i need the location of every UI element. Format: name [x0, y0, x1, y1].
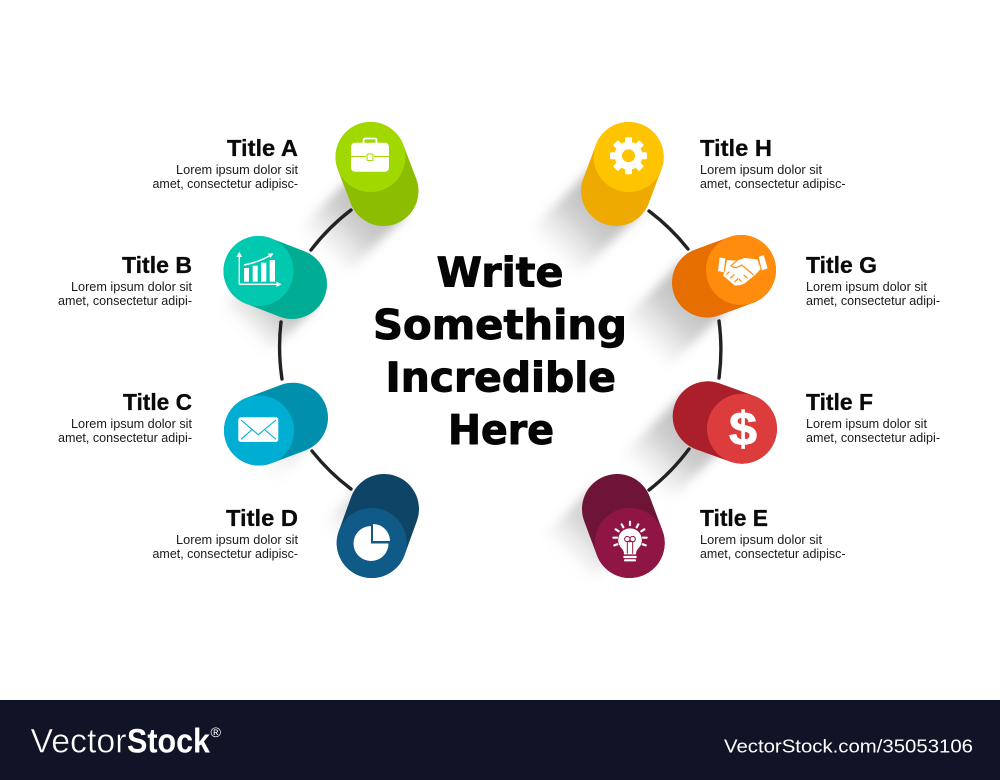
footer logo [30, 723, 222, 761]
label: Title B [58, 252, 192, 308]
footer logo: Stock [127, 723, 210, 761]
label: Title G: Lorem ipsum dolor sit [806, 279, 927, 294]
node D: navy cylinder [337, 508, 407, 578]
central heading: Incredible [386, 354, 616, 402]
footer bar [0, 700, 1000, 780]
central heading: Here [448, 406, 554, 454]
icon: briefcase [351, 138, 389, 172]
label: Title C [58, 389, 192, 445]
central heading: Something [373, 301, 627, 349]
label: Title C: Title C [123, 389, 192, 415]
label: Title F: Lorem ipsum dolor sit [806, 416, 927, 431]
label: Title A: amet, consectetur adipisc- [152, 176, 298, 191]
label: Title D: Title D [226, 505, 298, 531]
central heading: Write [436, 248, 564, 296]
label: Title C: amet, consectetur adipi- [58, 430, 192, 445]
label: Title B: amet, consectetur adipi- [58, 293, 192, 308]
icon: pie chart [354, 524, 390, 561]
label: Title G: Title G [806, 252, 877, 278]
label: Title A: Lorem ipsum dolor sit [176, 162, 298, 177]
label: Title H [700, 135, 846, 191]
icon: dollar sign: $ [729, 402, 757, 455]
icon: gear [610, 137, 647, 174]
label: Title G [806, 252, 940, 308]
label: Title H: Title H [700, 135, 772, 161]
icon: envelope [238, 417, 278, 442]
label: Title B: Title B [122, 252, 192, 278]
label: Title D: amet, consectetur adipisc- [152, 546, 298, 561]
node G: orange cylinder [706, 235, 776, 305]
connecting ring arcs [280, 210, 721, 490]
label: Title E: Lorem ipsum dolor sit [700, 532, 822, 547]
label: Title G: amet, consectetur adipi- [806, 293, 940, 308]
footer logo: Vector [30, 723, 126, 761]
label: Title F [806, 389, 940, 445]
footer logo: ® [210, 724, 222, 740]
label: Title A [152, 135, 298, 191]
node C: blue cylinder [224, 396, 294, 466]
label: Title H: Lorem ipsum dolor sit [700, 162, 822, 177]
node H: yellow cylinder [594, 122, 664, 192]
icon: growth chart [236, 252, 282, 287]
footer image id: VectorStock.com/35053106 [724, 736, 973, 756]
label: Title B: Lorem ipsum dolor sit [71, 279, 192, 294]
cylinder shadows [221, 168, 731, 583]
label: Title C: Lorem ipsum dolor sit [71, 416, 192, 431]
icon: light bulb [613, 522, 647, 560]
node F: red cylinder [707, 394, 777, 464]
label: Title A: Title A [227, 135, 298, 161]
node A: green cylinder [336, 122, 406, 192]
label: Title F: Title F [806, 389, 873, 415]
node E: maroon cylinder [595, 508, 665, 578]
label: Title E [700, 505, 846, 561]
label: Title F: amet, consectetur adipi- [806, 430, 940, 445]
label: Title D [152, 505, 298, 561]
label: Title E: Title E [700, 505, 768, 531]
label: Title D: Lorem ipsum dolor sit [176, 532, 298, 547]
label: Title H: amet, consectetur adipisc- [700, 176, 846, 191]
icon: handshake [718, 255, 768, 286]
central heading [373, 248, 627, 454]
node B: teal cylinder [224, 236, 294, 306]
label: Title E: amet, consectetur adipisc- [700, 546, 846, 561]
